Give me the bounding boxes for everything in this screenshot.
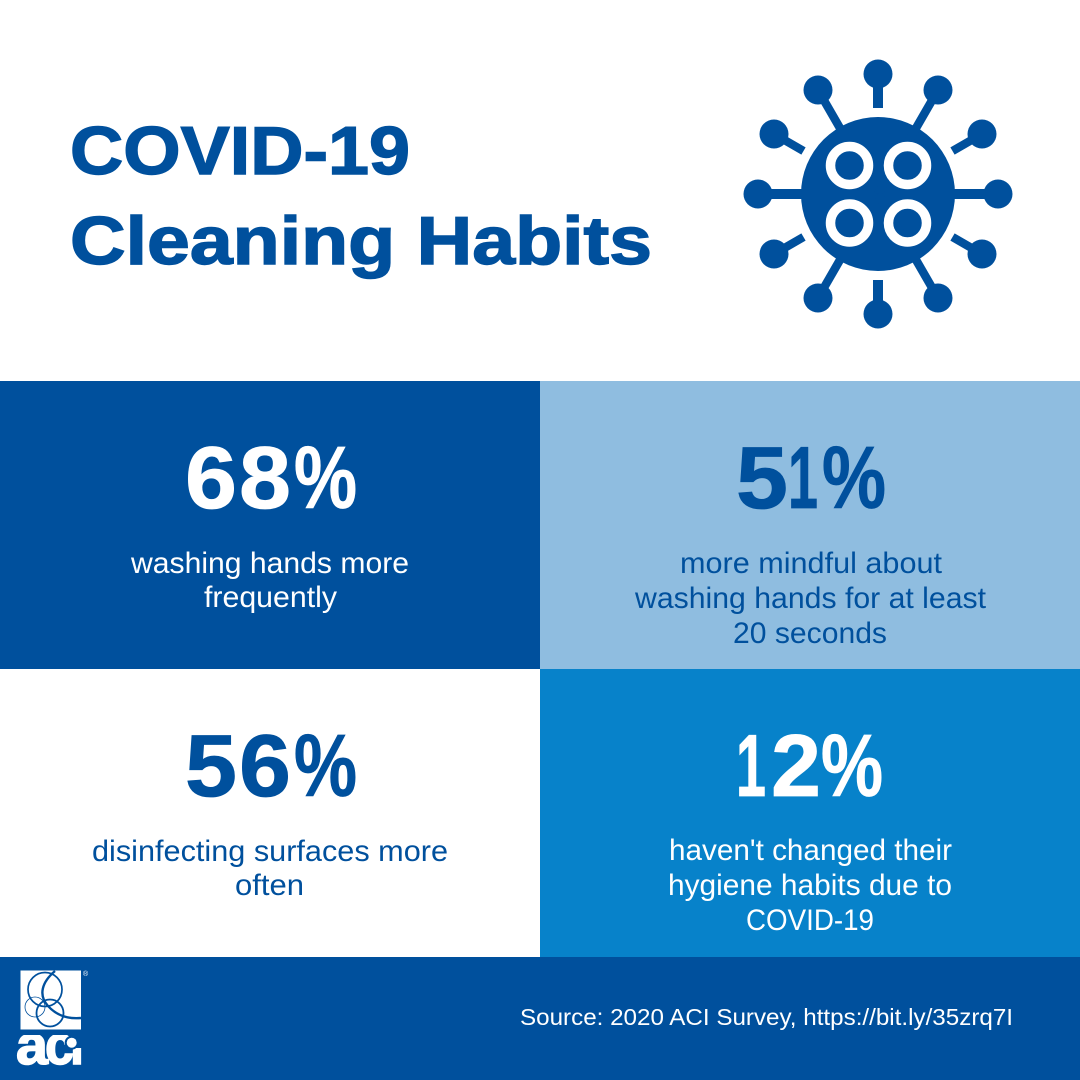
panel: 56% disinfecting <box>0 669 540 957</box>
footer band <box>0 957 1080 1080</box>
title: COVID-19 <box>70 113 410 189</box>
logo: ACI: c <box>45 1013 74 1076</box>
panel: 51% more mindful: more mindful about <box>680 547 943 580</box>
panel: 56% disinfecting: 6 <box>239 716 291 815</box>
panel: 56% disinfecting: disinfecting surfaces more <box>92 835 448 868</box>
panel: 51% more mindful: washing hands for at least <box>634 582 987 615</box>
logo: ACI <box>16 970 88 1066</box>
panel: 68% washing hands <box>0 381 540 669</box>
panel: 12% no change <box>540 669 1080 957</box>
logo: ACI: i <box>70 1013 84 1076</box>
title <box>70 113 652 279</box>
icon: virus <box>744 60 1012 328</box>
source text: Source: 2020 ACI Survey, https://bit.ly/35zrq7I <box>520 1004 1013 1030</box>
logo: ACI: ® <box>83 970 89 978</box>
panel: 68% washing hands: 6 <box>185 428 237 527</box>
panel: 56% disinfecting: % <box>294 716 357 815</box>
panel: 51% more mindful: % <box>822 428 886 527</box>
panel: 68% washing hands: washing hands more <box>130 547 409 580</box>
panel: 12% no change: 2 <box>771 716 821 815</box>
panel: 56% disinfecting: 5 <box>185 716 237 815</box>
panel: 12% no change: haven't changed their <box>669 834 952 867</box>
panel: 68% washing hands: % <box>294 428 357 527</box>
panel: 12% no change: % <box>821 716 883 815</box>
panel: 12% no change: COVID-19 <box>746 904 874 937</box>
panel: 51% more mindful <box>540 381 1080 669</box>
panel: 56% disinfecting: often <box>235 869 304 902</box>
panel: 51% more mindful: 5 <box>736 428 788 527</box>
panel: 12% no change: hygiene habits due to <box>668 869 952 902</box>
panel: 51% more mindful: 20 seconds <box>733 617 887 650</box>
panel: 68% washing hands: 8 <box>239 428 291 527</box>
logo: ACI: a <box>16 1013 49 1076</box>
panel: 51% more mindful: 1 <box>788 428 818 527</box>
panel: 12% no change: 1 <box>736 716 766 815</box>
title: Cleaning Habits <box>70 203 652 279</box>
panel: 68% washing hands: frequently <box>204 581 337 614</box>
